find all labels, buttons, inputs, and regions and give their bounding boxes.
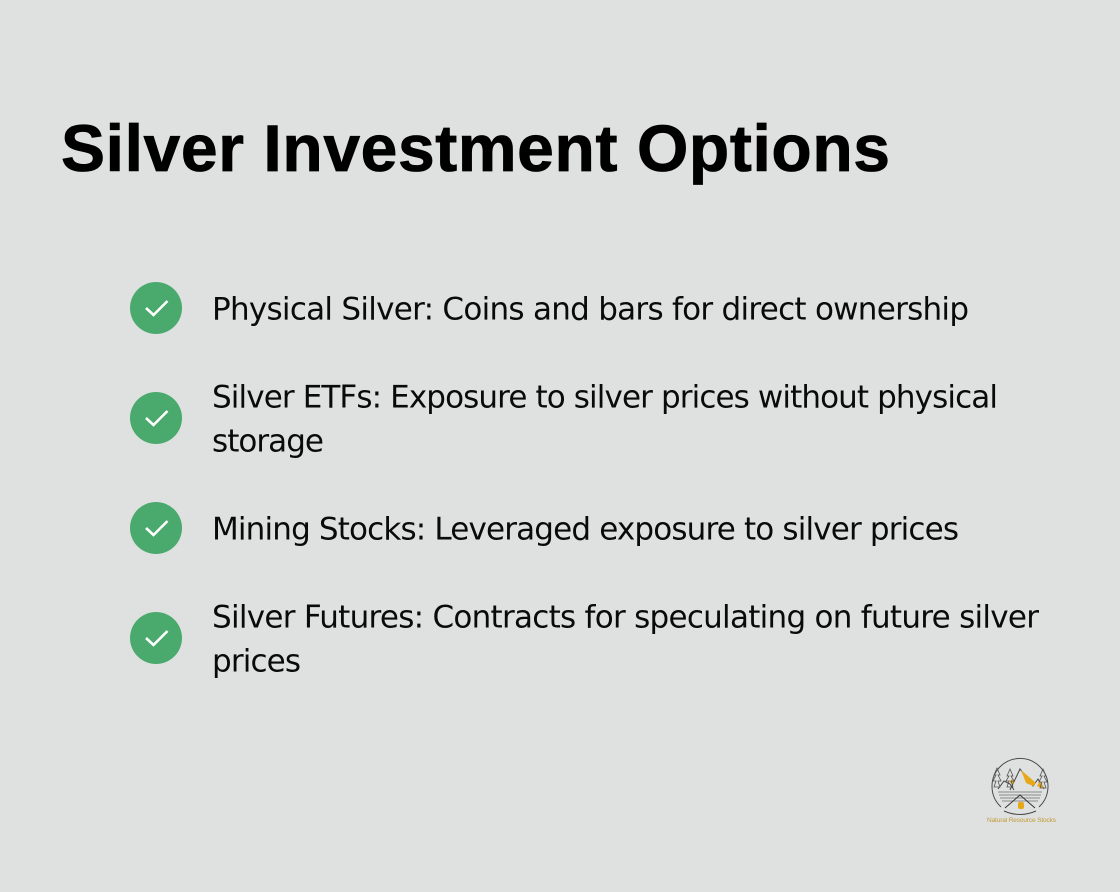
item text: Silver ETFs: Exposure to silver prices without physical xyxy=(212,380,998,416)
logo ring xyxy=(992,758,1048,814)
item text xyxy=(212,600,1039,680)
logo trees xyxy=(993,768,1047,788)
logo caption: Natural Resource Stocks xyxy=(987,817,1057,824)
logo ground lines xyxy=(998,792,1042,801)
logo door xyxy=(1018,802,1024,809)
item text: prices xyxy=(212,644,301,680)
list item: mining stocks xyxy=(130,502,959,554)
item text: Physical Silver: Coins and bars for direct ownership xyxy=(212,292,969,328)
list item: physical silver xyxy=(130,282,969,334)
list item: silver futures xyxy=(130,600,1039,680)
title: Silver Investment Options xyxy=(61,111,890,185)
item text: Mining Stocks: Leveraged exposure to silver prices xyxy=(212,512,959,548)
logo: Natural Resource Stocks xyxy=(987,758,1057,824)
icon: check badge xyxy=(130,502,182,554)
icon: check badge xyxy=(130,282,182,334)
item text xyxy=(212,380,998,460)
list item: silver ETFs xyxy=(130,380,998,460)
logo tent xyxy=(1005,795,1035,808)
logo mountain highlights xyxy=(1009,770,1044,789)
item text: Silver Futures: Contracts for speculating on future silver xyxy=(212,600,1039,636)
icon: check badge xyxy=(130,612,182,664)
logo mountains xyxy=(998,769,1044,790)
item text: storage xyxy=(212,424,324,460)
icon: check badge xyxy=(130,392,182,444)
